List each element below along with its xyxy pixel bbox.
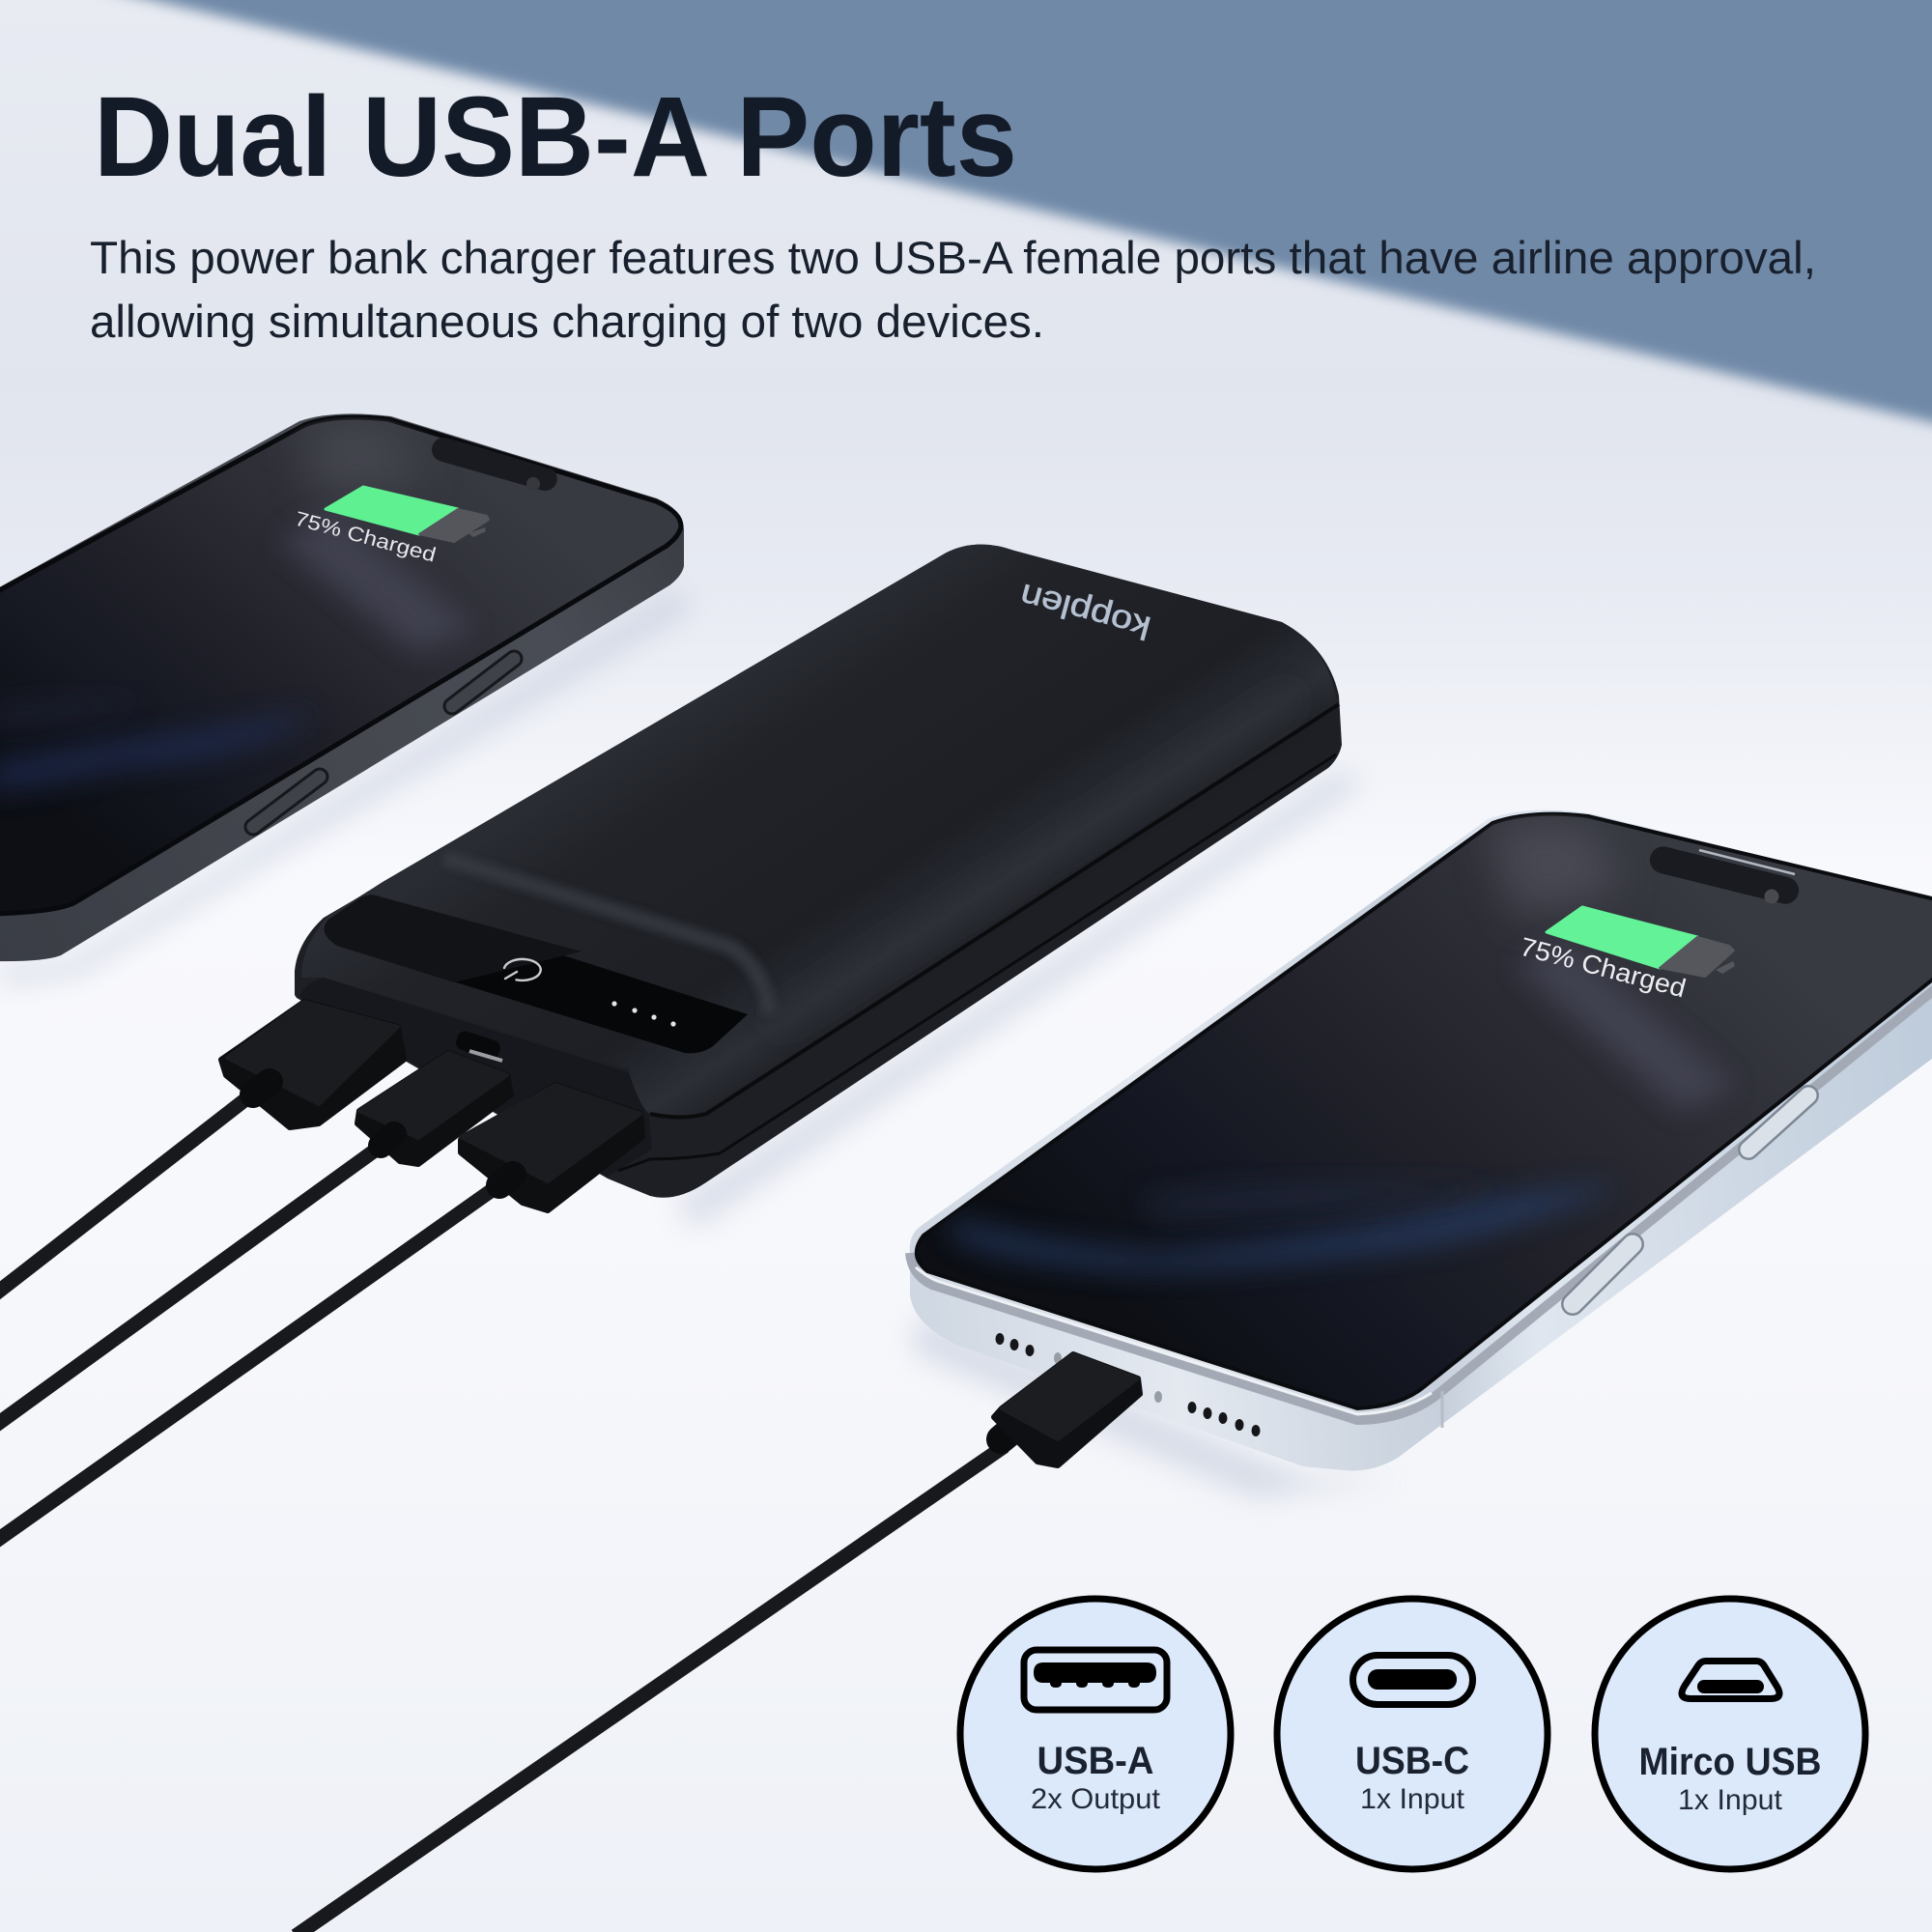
badge: USB-C: 1x Input	[1360, 1783, 1465, 1815]
badge: USB-A	[960, 1599, 1231, 1869]
right phone: 75% Charged	[1517, 932, 1689, 1003]
glossy panel	[325, 895, 748, 1053]
description text: This power bank charger features two USB-A female ports that have airline approval,	[90, 232, 1816, 283]
speaker holes	[995, 1333, 1260, 1436]
right phone screen	[917, 814, 1932, 1408]
badge: USB-A: 2x Output	[1031, 1783, 1161, 1815]
usb plugs at power bank	[221, 1002, 642, 1210]
battery indicator right	[1547, 907, 1697, 968]
badge: Micro USB: Mirco USB	[1638, 1741, 1822, 1783]
camera pill	[1647, 843, 1802, 907]
badge: USB-A: USB-A	[1037, 1740, 1153, 1782]
phone silver body	[910, 810, 1932, 1470]
screws	[1054, 1352, 1162, 1403]
battery indicator left: 75% Charged	[293, 508, 439, 567]
bank top shell	[301, 545, 1338, 1117]
bank lower body	[295, 545, 1342, 1198]
right phone top speaker slit	[1699, 850, 1795, 874]
indicator dots	[611, 1001, 676, 1027]
badge: Micro USB: 1x Input	[1678, 1784, 1783, 1816]
title: Dual USB-A Ports	[94, 73, 1017, 201]
seams	[650, 704, 1339, 1117]
micro usb port	[454, 1029, 502, 1062]
plug 1	[221, 1002, 404, 1127]
description text	[90, 232, 1816, 347]
left phone frame	[0, 413, 684, 961]
right phone rim	[910, 985, 1932, 1420]
description text: allowing simultaneous charging of two devices.	[90, 296, 1044, 347]
cables to power bank	[0, 1094, 497, 1544]
cable and plug to right phone	[296, 1354, 1140, 1932]
badge: Micro USB	[1595, 1599, 1865, 1869]
left phone	[0, 413, 684, 961]
soft shadows under devices	[0, 589, 1401, 1497]
left phone screen	[0, 417, 681, 914]
icon: USB-A port	[1024, 1650, 1167, 1710]
power button icon	[504, 959, 541, 980]
icon: USB-C port	[1352, 1656, 1472, 1704]
front port recess	[299, 978, 652, 1177]
right phone	[910, 810, 1932, 1470]
left phone side buttons	[253, 777, 320, 827]
raised edge highlight	[444, 858, 770, 1014]
plug 3	[461, 1085, 642, 1210]
badge: USB-C: USB-C	[1355, 1740, 1469, 1782]
battery indicator left	[293, 487, 489, 567]
background diagonal shadow band	[92, 0, 1932, 445]
badge: USB-C	[1277, 1599, 1548, 1869]
icon: micro USB port	[1682, 1662, 1779, 1698]
side buttons	[1573, 1244, 1633, 1304]
brand logo: kopplen	[1016, 577, 1154, 646]
plug 2	[357, 1053, 511, 1164]
power bank	[295, 545, 1342, 1198]
